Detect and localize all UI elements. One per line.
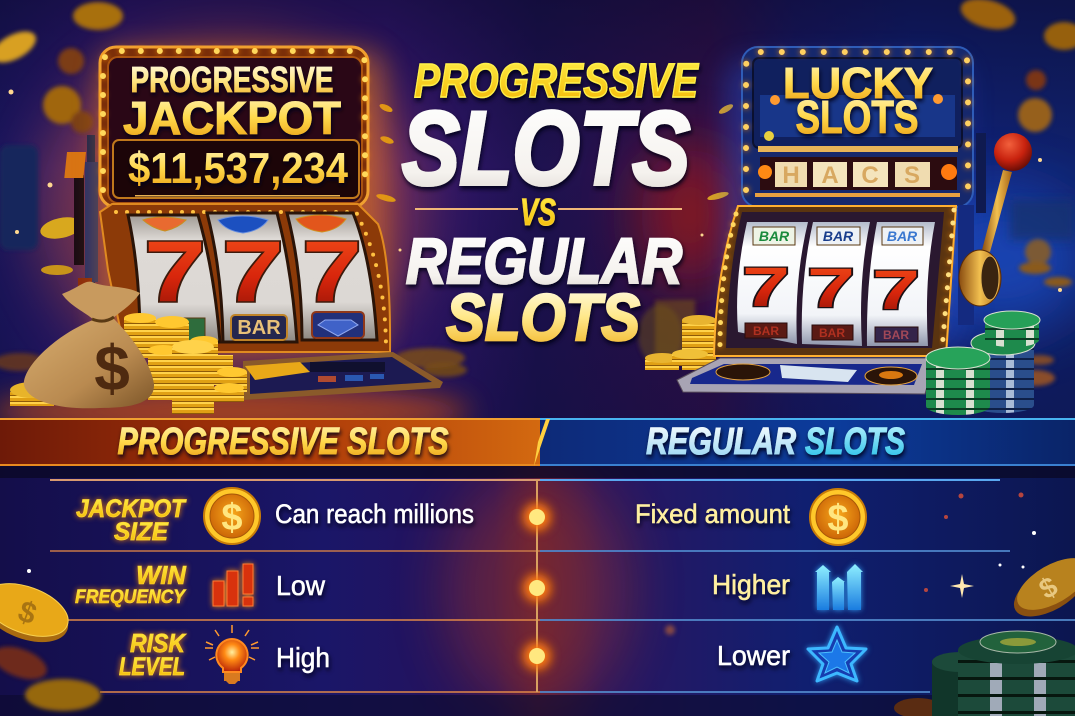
label: risk level: RISK <box>130 628 187 658</box>
right reel 2 <box>802 222 870 346</box>
right machine marquee cabinet <box>742 47 973 207</box>
left reel 3: 7 <box>302 224 362 320</box>
casino chip stacks <box>926 311 1040 415</box>
row: risk level <box>119 625 866 684</box>
right reel 1: BAR <box>759 228 790 244</box>
money bag: $ <box>94 332 130 404</box>
label: win frequency: FREQUENCY <box>75 587 187 608</box>
center timeline dots <box>523 503 551 670</box>
right slot machine: lucky slots <box>645 47 1040 415</box>
left machine button tray <box>243 352 443 400</box>
value: high: High <box>276 642 330 673</box>
label: jackpot size: JACKPOT <box>76 495 187 523</box>
sparkles and particles <box>27 492 1036 635</box>
title line: slots: SLOTS <box>402 91 690 207</box>
icon: gold dollar coin <box>204 488 260 544</box>
marquee title: progressive jackpot: JACKPOT <box>123 92 341 144</box>
right reel 3: BAR <box>883 328 909 342</box>
left reel 1 <box>128 215 220 342</box>
left machine marquee cabinet <box>100 47 368 207</box>
label: win frequency <box>75 560 187 608</box>
label: jackpot size <box>76 495 187 546</box>
right reel 2: BAR <box>819 326 845 340</box>
decorative coin: right: $ <box>1034 570 1063 605</box>
icon: gold dollar coin right: $ <box>827 498 849 540</box>
marquee title: lucky slots <box>783 59 933 143</box>
header band: regular slots: SLOTS <box>805 421 905 463</box>
left machine reel housing <box>100 204 390 352</box>
mini reels with letters: C <box>861 162 879 189</box>
header band: regular slots <box>540 418 1075 466</box>
label: risk level <box>119 628 187 681</box>
left reel 2: 7 <box>222 224 284 320</box>
gold coin stacks <box>124 313 247 414</box>
right reel 2: BAR <box>823 228 854 244</box>
header band: regular slots: REGULAR <box>646 421 796 463</box>
right reel 3: BAR <box>887 228 918 244</box>
right machine glow <box>725 60 965 350</box>
jackpot amount display: $11,537,234 <box>128 144 348 193</box>
right reel 2: 7 <box>807 256 855 319</box>
decorative coins: bottom left <box>0 640 101 711</box>
poker chip stacks: bottom right <box>894 631 1075 716</box>
mini reels with letters: H <box>782 162 800 189</box>
blurred gold coins <box>645 300 716 370</box>
value: fixed amount: Fixed amount <box>635 499 790 529</box>
marquee title: progressive jackpot: PROGRESSIVE <box>130 59 334 100</box>
right reel 1: BAR <box>753 324 779 338</box>
left machine lever <box>64 135 98 294</box>
marquee title: progressive jackpot <box>123 59 341 144</box>
right machine lever <box>959 133 1032 306</box>
label: jackpot size: SIZE <box>114 518 169 546</box>
icon: blue rising bars <box>815 564 863 610</box>
right reel 3 <box>867 222 935 346</box>
background coins and bokeh <box>0 0 1075 406</box>
right machine button tray <box>677 358 935 394</box>
row divider lines <box>50 480 1075 692</box>
comparison table background <box>0 466 1075 716</box>
value: can reach millions: Can reach millions <box>275 499 474 529</box>
icon: glowing light bulb <box>205 625 259 684</box>
icon: blue star <box>808 627 866 681</box>
right reel 3: 7 <box>872 258 920 321</box>
value: lower: Lower <box>717 640 790 671</box>
left machine glow <box>100 50 385 350</box>
title line: regular: REGULAR <box>406 225 682 297</box>
value: higher: Higher <box>712 569 790 600</box>
diamond symbol <box>312 312 364 338</box>
mini reels with letters: A <box>821 162 839 189</box>
bar symbol: BAR <box>237 317 281 339</box>
header slash divider <box>534 419 550 466</box>
header band: progressive slots: PROGRESSIVE SLOTS <box>118 421 448 463</box>
label: risk level: LEVEL <box>119 653 185 681</box>
mini reels with letters <box>775 162 930 189</box>
marquee title: lucky slots: SLOTS <box>796 91 918 143</box>
background: upper scene <box>0 0 1075 437</box>
title line: progressive: PROGRESSIVE <box>414 55 700 108</box>
right reel 1 <box>737 222 808 344</box>
icon: gold dollar coin: $ <box>221 497 243 539</box>
right machine reel housing <box>714 205 974 356</box>
header band: progressive slots <box>0 418 545 466</box>
left reel 1: 7 <box>144 224 206 320</box>
icon: gold dollar coin right <box>810 489 866 545</box>
title line: slots 2: SLOTS <box>446 280 640 354</box>
mini reels with letters: S <box>904 162 920 189</box>
value: low: Low <box>276 570 326 601</box>
money bag <box>24 282 154 408</box>
left slot machine: progressive jackpot <box>24 47 443 414</box>
left reel 3 <box>287 213 377 340</box>
decorative coin: right <box>1005 548 1075 627</box>
label: win frequency: WIN <box>136 560 187 590</box>
icon: red bars with exclamation <box>213 564 253 606</box>
row: jackpot size <box>76 488 866 546</box>
marquee title: lucky slots: LUCKY <box>783 59 933 108</box>
main title <box>402 55 700 354</box>
right machine side pole <box>976 133 986 213</box>
decorative coin: lower left: $ <box>14 595 41 632</box>
title divider and vs: VS <box>520 192 556 234</box>
decorative coin: lower left <box>0 573 76 653</box>
row: win frequency <box>75 560 863 610</box>
left reel 2 <box>207 213 297 342</box>
right reel 1: 7 <box>742 255 790 318</box>
